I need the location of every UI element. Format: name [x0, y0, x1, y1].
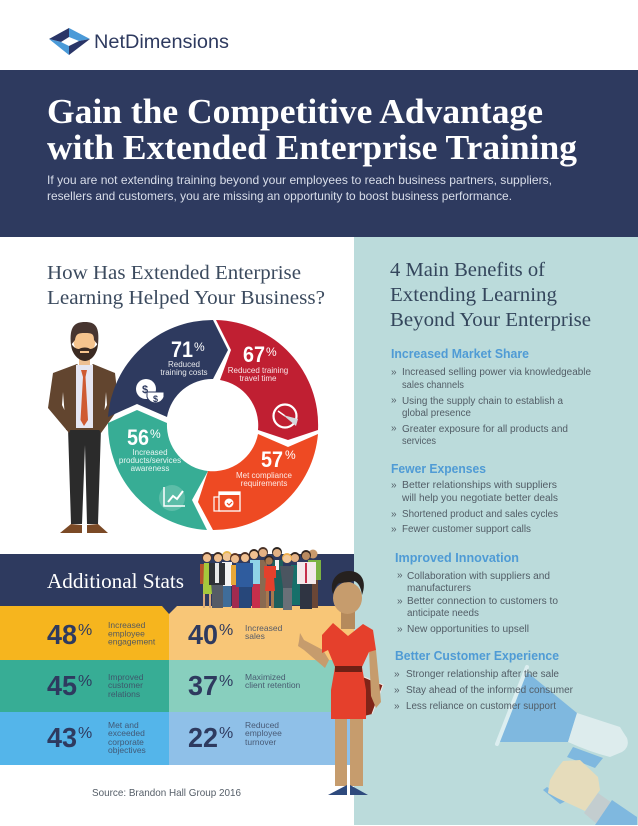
- megaphone illustration: [497, 667, 637, 825]
- illustration: crowd of people: [200, 547, 321, 610]
- intro text: [47, 173, 552, 203]
- stat: 43%: objectives: [108, 745, 146, 755]
- stat: 45%: relations: [108, 689, 140, 699]
- benefit: increased market share: [391, 347, 591, 447]
- segment: 71% reduced training costs: 71: [171, 337, 193, 362]
- stat: 45%: %: [78, 673, 92, 690]
- stat: 48%: %: [78, 622, 92, 639]
- segment: 56% increased awareness: %: [150, 427, 161, 441]
- segment: 67% reduced travel time: %: [266, 345, 277, 359]
- stat: 45%: [47, 670, 144, 701]
- icon: stopwatch: [274, 404, 298, 428]
- benefit: better customer experience: [394, 649, 574, 712]
- stat rows: [0, 606, 354, 765]
- heading: how has extended enterprise learning helped: How Has Extended Enterprise: [47, 262, 301, 284]
- stat: 22%: %: [219, 725, 233, 742]
- stat: 22%: Reduced: [245, 720, 279, 730]
- panel: benefits background: [354, 237, 638, 825]
- stat: 37%: Maximized: [245, 672, 286, 682]
- benefit: fewer expenses: Fewer customer support calls: [402, 524, 531, 535]
- heading: 4 main benefits: Beyond Your Enterprise: [390, 309, 591, 331]
- segment: 56% increased awareness: awareness: [131, 464, 169, 473]
- benefit: improved innovation: manufacturers: [407, 583, 471, 594]
- heading band: [0, 554, 354, 606]
- stat: 22%: employee: [245, 728, 282, 738]
- segment: 56% increased awareness: 56: [127, 425, 149, 450]
- donut chart: [108, 320, 318, 530]
- stat: 43%: exceeded: [108, 728, 145, 738]
- stat: 37%: client retention: [245, 680, 301, 690]
- segment: 71% reduced training costs: Reduced: [168, 360, 200, 369]
- segment: 71% reduced training costs: %: [194, 340, 205, 354]
- benefit: improved innovation: Collaboration with suppliers and: [407, 571, 550, 582]
- panel: benefits text: [390, 259, 591, 712]
- illustration: man in suit: [48, 322, 119, 533]
- segment: 71% reduced training costs: training costs: [160, 368, 208, 377]
- benefit: increased market share: Increased selling power via knowledgeable: [402, 367, 591, 378]
- benefit: increased market share: »: [391, 367, 397, 378]
- stat: 48%: employee: [108, 628, 145, 638]
- benefit: increased market share: global presence: [402, 408, 471, 419]
- stat: 45%: Improved: [108, 672, 144, 682]
- stat: 22%: turnover: [245, 737, 276, 747]
- segment: 56% increased awareness: Increased: [132, 448, 168, 457]
- stat: 40%: 40: [188, 619, 218, 650]
- benefit: increased market share: Greater exposure for all products and: [402, 424, 568, 435]
- heading: how has extended enterprise learning helped: [47, 262, 325, 309]
- intro text: If you are not extending training beyond your employees to reach business partners, suppliers,: [47, 173, 552, 187]
- stat: 22%: [188, 720, 282, 753]
- segment: 57% met compliance: requirements: [241, 479, 287, 488]
- source note: Source: Brandon Hall Group 2016: [92, 787, 241, 799]
- benefit: improved innovation: »: [397, 570, 403, 581]
- heading: 4 main benefits: Extending Learning: [390, 284, 557, 306]
- benefit: increased market share: Using the supply chain to establish a: [402, 396, 563, 407]
- stat: 43%: corporate: [108, 737, 144, 747]
- stat: 43%: [47, 720, 146, 755]
- heading: 4 main benefits: [390, 259, 591, 331]
- logo: NetDimensions: [94, 32, 229, 53]
- icon: dollar coins: $: [142, 384, 148, 396]
- benefit: improved innovation: Improved Innovation: [395, 551, 519, 565]
- benefit: fewer expenses: »: [391, 480, 397, 491]
- benefit: improved innovation: »: [397, 596, 403, 607]
- benefit: increased market share: sales channels: [402, 380, 464, 391]
- stat: 45%: customer: [108, 680, 143, 690]
- benefit: improved innovation: New opportunities to upsell: [407, 624, 529, 635]
- stat: 43%: 43: [47, 722, 77, 753]
- segment: 56% increased awareness: products/services: [119, 456, 181, 465]
- stat: 43%: Met and: [108, 720, 139, 730]
- intro text: resellers and customers, you are missing an opportunity to boost business performance.: [47, 189, 512, 203]
- benefit: increased market share: »: [391, 395, 397, 406]
- stat: 48%: engagement: [108, 636, 156, 646]
- segment: 67% reduced travel time: Reduced training: [228, 366, 288, 375]
- icon: line chart: [159, 485, 185, 511]
- benefit: increased market share: Increased Market Share: [391, 347, 529, 361]
- benefit: increased market share: services: [402, 436, 436, 447]
- heading: 4 main benefits: 4 Main Benefits of: [390, 259, 545, 281]
- benefit: better customer experience: »: [394, 685, 400, 696]
- icon: browser check: [214, 492, 240, 511]
- stat: 45%: 45: [47, 670, 77, 701]
- segment: 57% met compliance: 57: [261, 447, 283, 472]
- benefit: improved innovation: »: [397, 624, 403, 635]
- benefit: better customer experience: »: [394, 669, 400, 680]
- benefit: improved innovation: anticipate needs: [407, 608, 479, 619]
- stat: 43%: %: [78, 725, 92, 742]
- benefit: better customer experience: »: [394, 701, 400, 712]
- title: [47, 92, 578, 167]
- benefit: fewer expenses: Fewer Expenses: [391, 462, 486, 476]
- title: Gain the Competitive Advantage: [47, 92, 543, 131]
- stat: 48%: Increased: [108, 620, 146, 630]
- benefit: better customer experience: Stay ahead of the informed consumer: [406, 685, 574, 696]
- benefit: fewer expenses: will help you negotiate better deals: [401, 493, 558, 504]
- icon: dollar coins: $: [153, 394, 158, 404]
- benefit: better customer experience: Stronger relationship after the sale: [406, 669, 559, 680]
- illustration: woman with book: [298, 571, 383, 795]
- logo: [49, 28, 229, 55]
- segment: 57% met compliance: [198, 434, 318, 530]
- stat: 37%: 37: [188, 670, 218, 701]
- segment: 56% increased awareness: [108, 410, 208, 530]
- heading band: Additional Stats: [47, 569, 184, 593]
- segment: 67% reduced travel time: 67: [243, 342, 265, 367]
- title: with Extended Enterprise Training: [47, 128, 578, 167]
- stat: 40%: Increased: [245, 623, 283, 633]
- benefit: increased market share: »: [391, 423, 397, 434]
- stat: 37%: %: [219, 673, 233, 690]
- segment: 57% met compliance: Met compliance: [236, 471, 293, 480]
- stat: 22%: 22: [188, 722, 218, 753]
- segment: 67% reduced travel time: [216, 320, 318, 440]
- section: additional stats: [0, 554, 354, 765]
- stat: 48%: 48: [47, 619, 77, 650]
- header banner: [0, 70, 638, 237]
- benefit: improved innovation: Better connection to customers to: [407, 596, 558, 607]
- benefit: fewer expenses: Shortened product and sales cycles: [402, 509, 558, 520]
- benefit: fewer expenses: Better relationships with suppliers: [402, 480, 557, 491]
- benefit: better customer experience: Better Customer Experience: [395, 649, 559, 663]
- segment: 57% met compliance: %: [285, 448, 296, 462]
- benefit: improved innovation: [395, 551, 558, 635]
- benefit: fewer expenses: [391, 462, 558, 535]
- segment: 67% reduced travel time: travel time: [240, 374, 277, 383]
- benefit: better customer experience: Less reliance on customer support: [406, 701, 556, 712]
- benefit: fewer expenses: »: [391, 524, 397, 535]
- icon: dollar coins: [136, 379, 164, 404]
- heading: how has extended enterprise learning helped: Learning Helped Your Business?: [47, 287, 325, 309]
- stat: 40%: [188, 619, 283, 650]
- stat: 40%: %: [219, 622, 233, 639]
- benefit: fewer expenses: »: [391, 509, 397, 520]
- stat: 48%: [47, 619, 156, 650]
- stat: 40%: sales: [245, 631, 265, 641]
- segment: 71% reduced training costs: [108, 320, 228, 417]
- stat: 37%: [188, 670, 301, 701]
